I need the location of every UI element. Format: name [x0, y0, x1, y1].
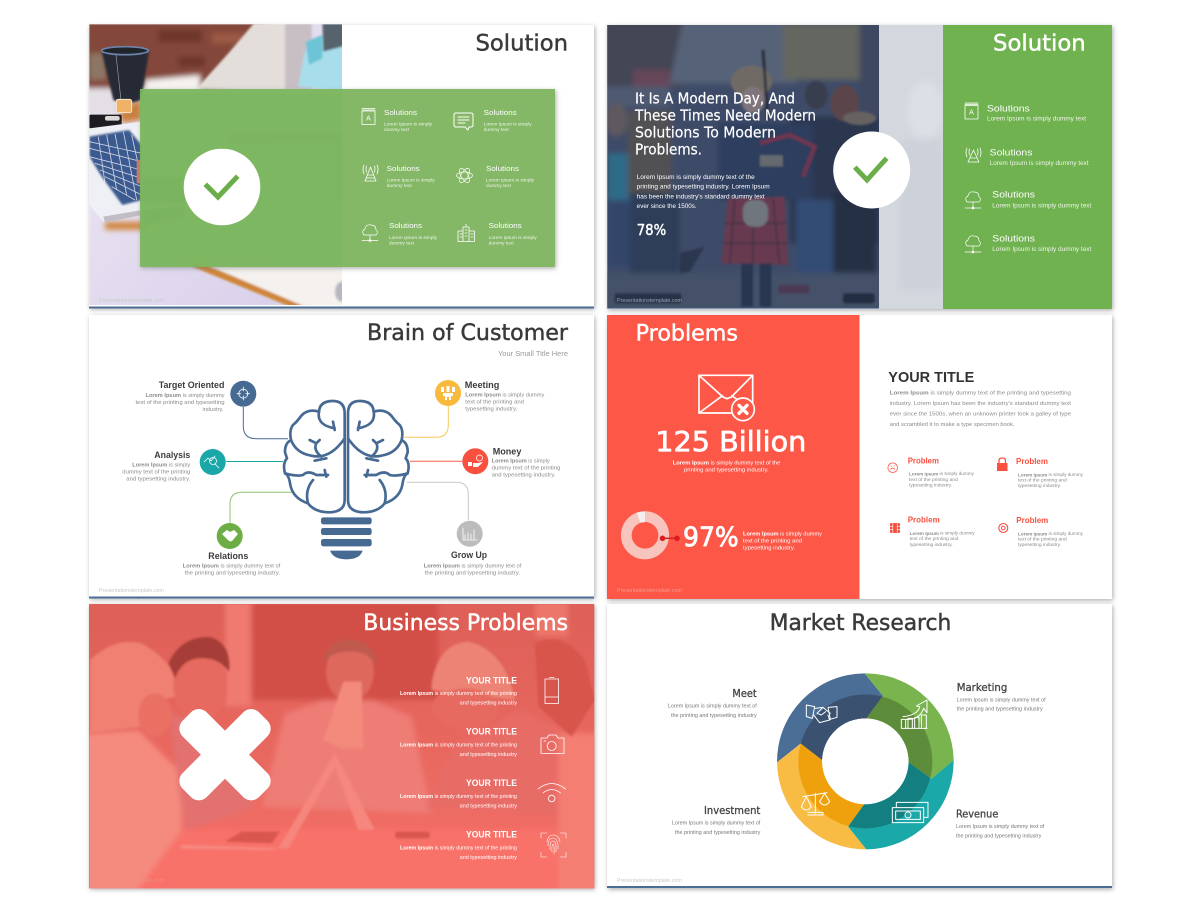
item: grow up: the printing and typesetting industry. [425, 571, 520, 577]
problem: film [890, 514, 975, 547]
item: antenna solutions: dummy text [387, 183, 412, 189]
stat note: text of the printing and [743, 538, 802, 544]
donut chart [626, 511, 680, 554]
problem: sad face [888, 455, 975, 488]
problem: film: Lorem Ipsum is simply dummy [910, 530, 975, 536]
item: analysis: and typesetting industry. [126, 477, 191, 483]
item: target oriented: text of the printing and typesetting [136, 400, 224, 406]
problem: at sign: Problem [1016, 515, 1049, 525]
item: meeting: Meeting [465, 380, 500, 391]
item: cloud solutions: Lorem Ipsum is simply [389, 235, 438, 241]
stat caption: printing and typesetting industry. [684, 468, 769, 474]
label: revenue: Lorem Ipsum is simply dummy text of [956, 824, 1045, 830]
body paragraph: ever since the 1500s, when an unknown printer took a galley of type [890, 411, 1071, 417]
label: revenue: the printing and typesetting industry [956, 833, 1042, 839]
item: book solutions: A [366, 116, 371, 122]
item: cloud solutions: Solutions [389, 223, 423, 230]
item: target oriented: industry. [202, 407, 224, 413]
label: revenue: Revenue [956, 808, 998, 820]
problem: film: text of the printing and [910, 536, 959, 541]
item: meeting [435, 380, 544, 412]
label: investment: Lorem Ipsum is simply dummy text of [672, 821, 761, 827]
heading: It Is A Modern Day, And [635, 89, 795, 107]
item: fingerprint: YOUR TITLE [466, 829, 517, 839]
icon: banknotes [892, 802, 928, 823]
problem: film: Problem [908, 514, 940, 524]
stat caption: Lorem Ipsum is simply dummy text of the [673, 461, 780, 467]
footer watermark: Presentationstemplate.com [617, 298, 682, 304]
title: Solution [476, 32, 568, 56]
icon: cross [175, 704, 275, 805]
body text: ever since the 1500s. [637, 203, 697, 210]
item: cloud solutions: dummy text [389, 241, 415, 247]
item: atom solutions: Lorem Ipsum is simply [486, 178, 535, 184]
stat 97%: 97% [683, 522, 739, 553]
footer watermark: Presentationstemplate.com [99, 878, 164, 884]
item: book solutions: Lorem Ipsum is simply [384, 122, 433, 128]
label: investment: Investment [704, 805, 760, 817]
item: antenna: Lorem Ipsum is simply dummy text [990, 161, 1089, 167]
icon: envelope with cross [699, 375, 754, 421]
problem: sad face: Problem [908, 455, 939, 465]
photo: laptop desk [85, 20, 348, 310]
item: battery: and typesetting industry [460, 701, 518, 707]
problem: lock [997, 456, 1084, 488]
problem: at sign: text of the printing and [1018, 536, 1067, 542]
item: grow up: Grow Up [451, 550, 487, 561]
item: antenna solutions: Lorem Ipsum is simply [387, 178, 435, 184]
item: money: Money [493, 446, 522, 458]
item: cloud: Lorem Ipsum is simply dummy text [992, 203, 1092, 209]
item: chat solutions [454, 110, 532, 133]
check circle [833, 132, 910, 208]
item: atom solutions [456, 166, 535, 189]
item: wifi [400, 778, 566, 809]
item: atom solutions: dummy text [486, 183, 512, 189]
label: marketing: Marketing [957, 682, 1007, 694]
problem: at sign [999, 515, 1084, 547]
body text: printing and typesetting industry. Lorem Ipsum [637, 184, 770, 190]
item: analysis: Analysis [154, 450, 190, 461]
label: investment [672, 805, 761, 836]
check circle [184, 149, 260, 225]
problem: lock: typesetting industry. [1018, 483, 1061, 488]
item: grow up: Lorem Ipsum is simply dummy text of [424, 564, 522, 570]
body text: has been the industry's standard dummy text [637, 194, 765, 200]
red panel [607, 315, 860, 599]
item: cloud: Solutions [992, 190, 1036, 200]
item: money [462, 446, 560, 479]
label: marketing: the printing and typesetting industry [957, 707, 1043, 713]
title: Solution [993, 32, 1086, 56]
body paragraph: industry. Lorem Ipsum has been the industry's standard dummy text [890, 401, 1071, 407]
item: chat solutions: Solutions [484, 110, 517, 117]
item: atom solutions: Solutions [486, 166, 520, 173]
item: battery [400, 675, 558, 707]
item: battery: Lorem Ipsum is simply dummy text of the printing [400, 691, 517, 697]
item: camera: Lorem Ipsum is simply dummy text of the printing [400, 743, 517, 749]
subtitle: Your Small Title Here [498, 351, 568, 358]
label: investment: the printing and typesetting industry [675, 830, 761, 836]
item: meeting: typesetting industry. [465, 406, 518, 412]
item: cloud solutions [362, 223, 438, 247]
footer watermark: Presentationstemplate.com [99, 588, 164, 594]
item: fingerprint: Lorem Ipsum is simply dummy text of the printing [400, 845, 517, 851]
label: meet [668, 688, 757, 719]
connectors [226, 406, 468, 523]
segment: marketing [865, 673, 954, 779]
stat note [743, 531, 822, 551]
ring chart [777, 673, 954, 849]
stat 125 billion: 125 Billion [655, 425, 806, 458]
icon: scales [801, 793, 830, 815]
item: analysis: Lorem Ipsum is simply [132, 463, 190, 469]
item: book [965, 103, 1086, 123]
footer watermark: Presentationstemplate.com [617, 878, 682, 884]
label: marketing: Lorem Ipsum is simply dummy text of [957, 697, 1046, 703]
heading: your title: YOUR TITLE [888, 369, 974, 386]
item: building solutions [458, 223, 537, 247]
item: camera: YOUR TITLE [466, 727, 517, 737]
item: book: A [969, 110, 974, 116]
footer watermark: Presentationstemplate.com [617, 588, 682, 594]
label: revenue [956, 808, 1045, 839]
item: building solutions: dummy text [489, 241, 514, 247]
item: book solutions [362, 108, 433, 133]
item: book: Lorem Ipsum is simply dummy text [987, 117, 1086, 123]
item: wifi: and typesetting industry [460, 803, 518, 809]
problem: at sign: Lorem Ipsum is simply dummy [1018, 531, 1084, 536]
item: meeting: Lorem Ipsum is simply dummy [465, 393, 544, 399]
segment: meet [777, 673, 883, 762]
segment: investment [777, 744, 866, 849]
item: building solutions: Lorem Ipsum is simply [489, 235, 537, 241]
icon: growth chart [901, 700, 927, 728]
item: money: dummy text of the printing [492, 466, 560, 472]
item: camera: and typesetting industry [460, 752, 518, 758]
title: Business Problems [363, 611, 568, 636]
item: chat solutions: Lorem Ipsum is simply [484, 122, 532, 128]
item: analysis [122, 449, 226, 483]
body paragraph: Lorem Ipsum is simply dummy text of the printing and typesetting [890, 391, 1071, 397]
item: wifi: Lorem Ipsum is simply dummy text of the printing [400, 794, 517, 800]
item: book solutions: Solutions [384, 110, 418, 117]
item: battery: YOUR TITLE [466, 675, 517, 685]
item: money: and typesetting industry. [492, 473, 556, 479]
stat caption [673, 461, 780, 474]
item: grow up [424, 521, 522, 577]
item: book solutions: dummy text [384, 127, 410, 133]
problem: sad face: typesetting industry. [909, 482, 952, 488]
item: money: Lorem Ipsum is simply [492, 459, 550, 465]
segment: revenue [848, 760, 954, 849]
item: antenna [966, 148, 1089, 167]
slide: market research [607, 604, 1112, 888]
footer watermark: Presentationstemplate.com [99, 298, 164, 304]
title: Problems [636, 322, 738, 346]
problem: film: typesetting industry. [910, 542, 953, 547]
item: antenna solutions [363, 165, 435, 189]
item: fingerprint [400, 829, 566, 861]
item: camera [400, 727, 564, 758]
item: meeting: text of the printing and [465, 400, 524, 406]
faded strip [879, 25, 943, 309]
slide: solution with photo [85, 20, 594, 310]
label: meet: Lorem Ipsum is simply dummy text of [668, 704, 757, 710]
item: antenna: Solutions [990, 148, 1033, 158]
body paragraph [890, 391, 1071, 428]
item: book: Solutions [987, 103, 1030, 113]
slide: brain of customer [89, 315, 594, 598]
item: antenna solutions: Solutions [387, 166, 420, 173]
brain icon [284, 401, 409, 559]
item: chat solutions: dummy text [484, 127, 509, 133]
title: Brain of Customer [367, 321, 569, 346]
heading [634, 89, 816, 158]
problem: lock: Problem [1016, 456, 1048, 466]
item: analysis: dummy text of the printing [122, 470, 190, 476]
item: cloud 2 [965, 233, 1092, 253]
body paragraph: and scrambled it to make a type specimen book. [890, 422, 1015, 428]
label: marketing [957, 682, 1046, 713]
item: relations: Relations [208, 551, 248, 562]
stat note: Lorem Ipsum is simply dummy [743, 531, 822, 537]
slide: problems [607, 315, 1112, 599]
item: target oriented: Target Oriented [159, 380, 225, 391]
item: relations [183, 523, 281, 577]
item: cloud 2: Lorem Ipsum is simply dummy text [992, 247, 1092, 253]
problem: sad face: text of the printing and [909, 477, 958, 482]
problem: lock: text of the printing and [1018, 478, 1067, 482]
item: target oriented: Lorem Ipsum is simply dummy [146, 393, 225, 399]
item: building solutions: Solutions [489, 223, 522, 230]
slide: business problems [85, 600, 600, 893]
problem: at sign: typesetting industry. [1018, 542, 1061, 547]
item: cloud [965, 190, 1092, 209]
stat note: typesetting industry. [743, 545, 795, 551]
item: relations: the printing and typesetting industry. [185, 571, 280, 577]
heading: Solutions To Modern [635, 123, 776, 141]
green panel [140, 89, 555, 267]
heading: These Times Need Modern [634, 106, 816, 124]
photo: meeting with red overlay [85, 600, 600, 893]
heading: Problems. [635, 140, 702, 158]
title: Market Research [770, 611, 951, 636]
stat 78%: 78% [637, 221, 666, 239]
item: wifi: YOUR TITLE [466, 778, 517, 788]
slide: solution with bagpiper photo [603, 20, 1112, 310]
problem: lock: Lorem Ipsum is simply dummy [1018, 472, 1084, 477]
item: relations: Lorem Ipsum is simply dummy text of [183, 564, 281, 570]
item: fingerprint: and typesetting industry [460, 855, 518, 861]
label: meet: the printing and typesetting industry [671, 713, 757, 719]
problem: sad face: Lorem Ipsum is simply dummy [909, 471, 975, 476]
label: meet: Meet [732, 688, 757, 700]
item: target oriented [136, 380, 256, 413]
green side panel [943, 25, 1112, 309]
body text [637, 174, 770, 210]
photo: bagpiper street [603, 20, 883, 310]
icon: handshake [806, 705, 837, 723]
item: cloud 2: Solutions [992, 233, 1036, 243]
body text: Lorem Ipsum is simply dummy text of the [637, 174, 755, 181]
